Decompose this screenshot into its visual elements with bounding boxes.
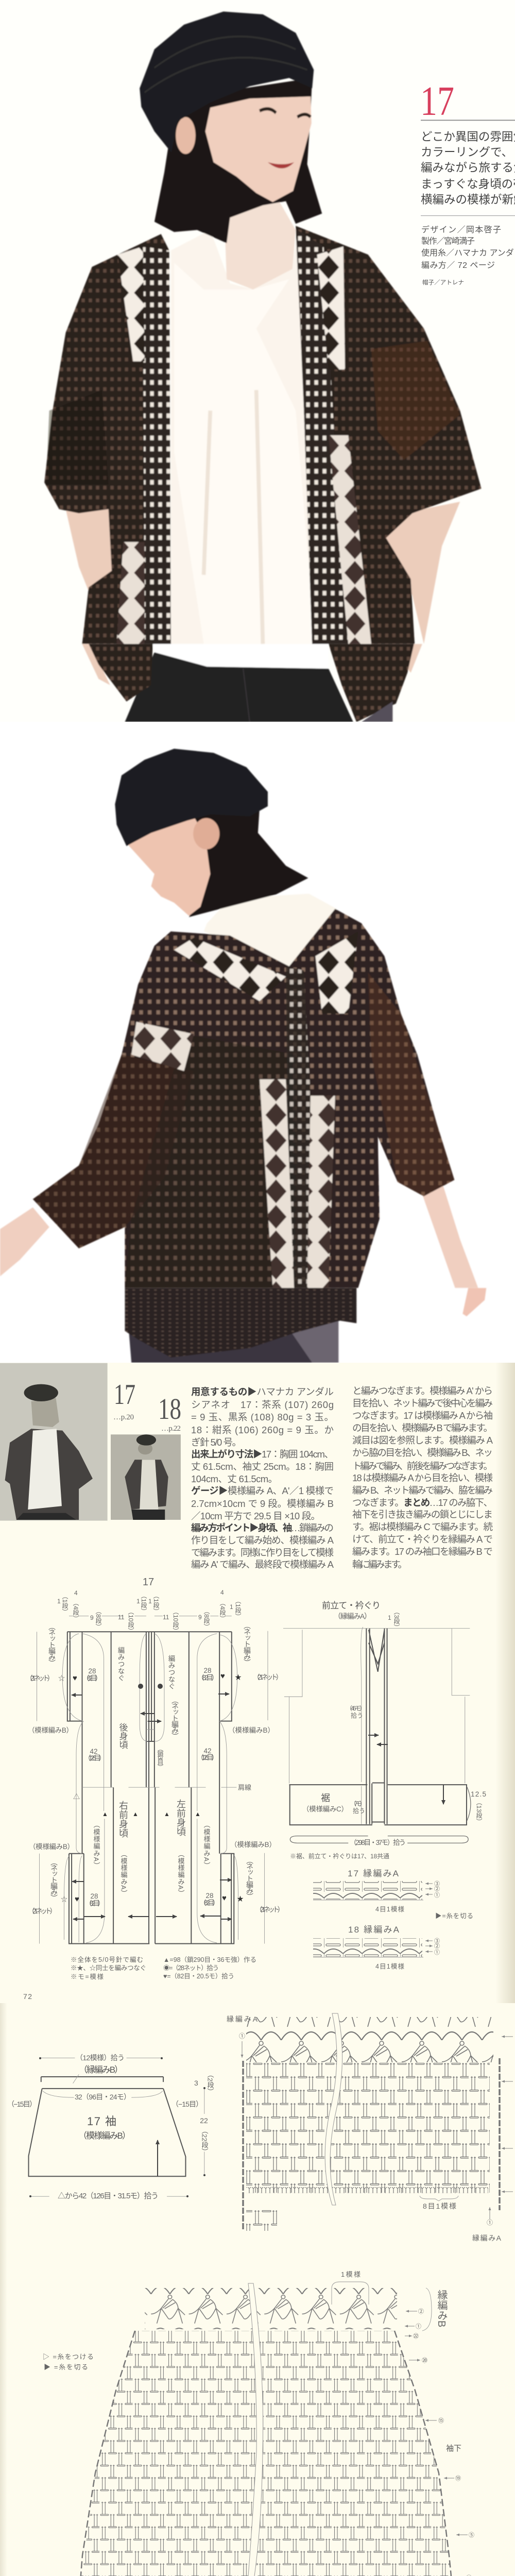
labels on schematic 17: （模様編みB） [230, 1841, 276, 1849]
text block: instructions right column: 編みます。17 のみ袖口を縁編み B で [352, 1546, 493, 1557]
labels on schematic 17: ▲ [132, 1810, 139, 1818]
labels on front band and hem diagram: 拾う [353, 1807, 365, 1815]
labels on schematic 17: 編みつなぐ [116, 1647, 125, 1682]
hair [154, 78, 322, 243]
edge chart: 17 edging A [313, 1869, 473, 1920]
chart: sleeve pattern B with edging B: ▷ =糸をつける [43, 2353, 94, 2361]
numbers and page refs [113, 1379, 181, 1433]
chart: sleeve pattern B with edging B: 1模様 [341, 2270, 360, 2278]
sleeve schematic 17: 22 [200, 2116, 208, 2125]
labels on schematic 17: 9 [198, 1614, 202, 1621]
labels on schematic 17: 肩線 [238, 1784, 251, 1791]
waist shirt hem [153, 644, 329, 669]
text block: materials and instructions left column: 丈 61.5cm、袖丈 25cm。18：胸囲 [191, 1461, 334, 1472]
neck [224, 193, 296, 290]
labels on schematic 17: 右前身頃 [118, 1801, 128, 1838]
notes for 17: ※全体を5/0号針で編む [71, 1956, 143, 1963]
edge chart: 17 edging A: ② [434, 1886, 440, 1892]
text block: instructions right column: 減目は図を参照します。模様編み A [352, 1435, 493, 1446]
photo: model wearing cardigan, front view [44, 11, 482, 722]
labels on schematic 17: （82目） [197, 1674, 218, 1682]
labels on schematic 17: 28 [205, 1892, 214, 1900]
labels on front band and hem diagram: 裾 [321, 1793, 330, 1803]
labels on schematic 17: 11 [163, 1614, 169, 1621]
text block: credits: 帽子／アトレナ [422, 279, 464, 286]
page background [0, 2003, 515, 2576]
beret [115, 749, 268, 846]
text block: credits: 編み方／ 72 ページ [421, 261, 495, 270]
labels on front band and hem diagram: （7モ） [350, 1800, 366, 1807]
labels on schematic 17 [26, 1577, 284, 1915]
notes for 17: ※モ=模様 [71, 1973, 104, 1980]
panel: back photo background [0, 722, 515, 1363]
labels on schematic 17: （126目） [197, 1754, 218, 1761]
labels on schematic 17: （21ネット） [253, 1673, 283, 1681]
eyes and lips [260, 109, 311, 117]
page number: 72 [23, 1992, 32, 2001]
cardigan hem left [89, 644, 153, 702]
sleeve schematic 17: （−15目） [171, 2100, 203, 2108]
labels on schematic 17: ▲ [195, 1810, 201, 1818]
beret [140, 11, 314, 152]
title: number 17: 17 [420, 79, 454, 124]
panel: page 72 [0, 1363, 515, 2003]
text block: instructions right column: つなぎます。まとめ…17 のみ脇下、 [352, 1497, 493, 1508]
chart: sleeve pattern B with edging B: ② [418, 2308, 424, 2315]
text block: instructions right column [352, 1385, 493, 1570]
text block: materials and instructions left column [191, 1386, 334, 1570]
text block: instructions right column: す。裾は模様編み C で編みます。続 [352, 1521, 493, 1532]
text block: materials and instructions left column: 用意するもの▶ハマナカ アンダル [191, 1386, 334, 1397]
labels on schematic 17: 編みつなぐ [167, 1655, 175, 1690]
labels on schematic 17: 28 [90, 1892, 98, 1900]
photo: grey thumbnail of 18 [111, 1434, 181, 1520]
page gutter [495, 1363, 515, 2003]
numbers and page refs: 18 [158, 1392, 181, 1426]
hands [82, 644, 110, 685]
cardigan hem [125, 1288, 356, 1358]
sleeve schematic 17: （模様編みB） [78, 2131, 131, 2141]
text block: credits [421, 225, 514, 286]
text block: instructions right column: から脇の目を拾い、模様編み B、ネッ [352, 1447, 493, 1458]
face [205, 96, 312, 202]
labels on schematic 17: （鎖3目） [157, 1745, 164, 1770]
labels on schematic 17: 17 [143, 1577, 154, 1588]
text block: credits: デザイン／岡本啓子 [421, 225, 501, 234]
labels on schematic 17: （模様編みB） [29, 1843, 74, 1851]
notes for 17: ▲=98（鎖290目・36モ強）作る [163, 1956, 256, 1963]
text block: materials and instructions left column: 編み A' で編み、最終段で模様編み A [191, 1559, 334, 1570]
chart: edging A and pattern B: ① [239, 2032, 245, 2040]
labels on schematic 17: 42 [203, 1747, 212, 1755]
labels on schematic 17: 左前身頃 [176, 1799, 186, 1836]
labels on schematic 17: （1段） [140, 1592, 147, 1615]
text block: materials and instructions left column: ／10cm 平方で 29.5 目 ×10 段。 [191, 1511, 320, 1521]
labels on schematic 17: ☆ [61, 1895, 67, 1903]
chart: sleeve pattern B with edging B: ㉒ [413, 2333, 419, 2340]
edge chart: 17 edging A: 17 縁編みA [348, 1869, 399, 1878]
centre back band [286, 967, 320, 1288]
trousers [129, 1319, 338, 1363]
labels on schematic 17: 9 [90, 1614, 94, 1621]
chart: sleeve pattern B with edging B: ▶ =糸を切る [44, 2363, 88, 2371]
jacket right panel [296, 226, 482, 644]
labels on schematic 17: 4 [74, 1589, 78, 1597]
labels on front band and hem diagram: 前立て・衿ぐり [322, 1601, 381, 1611]
labels on schematic 17: ★ [237, 1895, 244, 1903]
jacket body [33, 909, 454, 1288]
sleeve schematic 17: 32（96目・24モ） [75, 2093, 131, 2101]
labels on schematic 17: 1 [148, 1598, 152, 1605]
labels on front band and hem diagram: （縁編みA） [334, 1612, 371, 1620]
jacket left panel [44, 234, 171, 644]
edge chart: 17 edging A: 4目1模様 [375, 1905, 404, 1913]
page gutter [0, 2003, 7, 2576]
labels on schematic 17: （21ネット） [28, 1907, 57, 1915]
labels on schematic 17: （82目） [199, 1899, 219, 1907]
labels on schematic 17: （21ネット） [255, 1906, 284, 1913]
photo: grey thumbnail of 17 [0, 1363, 108, 1521]
text block: materials and instructions left column: 編み方ポイント▶身頃、袖…鎖編みの [191, 1522, 334, 1533]
face [127, 817, 210, 916]
labels on schematic 17: （10段） [127, 1608, 134, 1634]
labels on front band and hem diagram: 拾う [351, 1711, 363, 1719]
labels on schematic 17: （模様編みA） [203, 1821, 210, 1869]
text block: intro [421, 130, 515, 206]
labels on front band and hem diagram: 12.5 [471, 1790, 486, 1798]
labels on schematic 17: （1段） [61, 1593, 68, 1615]
text block: materials and instructions left column: 2.7cm×10cm で 9 段。模様編み B [191, 1498, 334, 1509]
skirt shade [362, 702, 392, 722]
labels on front band and hem diagram [290, 1601, 486, 1860]
edge chart: 18 edging A: 4目1模様 [375, 1962, 404, 1970]
chart: sleeve pattern B with edging B: ⑲ [455, 2475, 461, 2482]
labels on schematic 17: ▲ [102, 1810, 108, 1818]
front bands [143, 246, 171, 644]
labels on schematic 17: 28 [88, 1667, 96, 1675]
labels on front band and hem diagram: （模様編みC） [302, 1805, 348, 1813]
labels on schematic 17: （模様編みB） [28, 1726, 73, 1734]
text block: materials and instructions left column: 104cm、丈 61.5cm。 [191, 1473, 278, 1484]
labels on schematic 17: 28 [203, 1667, 212, 1674]
text block: materials and instructions left column: ゲージ▶模様編み A、A'／1 模様で [191, 1485, 334, 1496]
numbers and page refs: 17 [114, 1379, 135, 1411]
divider rule [421, 120, 515, 121]
labels on front band and hem diagram: 1 [388, 1614, 391, 1621]
labels on schematic 17: （模様編みA） [119, 1851, 128, 1896]
text block: credits: 使用糸／ハマナカ アンダ [421, 248, 514, 258]
labels on schematic 17: ★ [235, 1673, 242, 1681]
text block: instructions right column: けて、前立て・衿ぐりを縁編み A で [352, 1534, 493, 1545]
panel: front photo background [0, 0, 515, 722]
chart: sleeve pattern B with edging B [43, 2270, 494, 2576]
labels on schematic 17: ♥ [220, 1672, 225, 1681]
labels on schematic 17: ♥ [222, 1894, 227, 1903]
sleeve schematic 17: 17 袖 [87, 2115, 116, 2128]
chart: sleeve pattern B with edging B: 袖下 [446, 2444, 461, 2453]
labels on schematic 17: ▲ [164, 1810, 170, 1818]
labels on schematic 17: ♥ [75, 1895, 79, 1904]
chart: sleeve pattern B with edging B: ⑳ [422, 2357, 427, 2364]
labels on schematic 17: （21ネット） [26, 1674, 54, 1682]
chart: sleeve pattern B with edging B: ① [416, 2323, 421, 2330]
labels on schematic 17: （126目） [84, 1754, 106, 1762]
cardigan hem right [329, 644, 414, 722]
right arm [384, 502, 460, 644]
labels on schematic 17: ☆ [58, 1674, 65, 1682]
numbers and page refs: …p.20 [113, 1413, 134, 1421]
text block: instructions right column: ト編みで編み、前後を編みつなぎます。 [352, 1461, 493, 1471]
labels on front band and hem diagram: （46モ） [346, 1705, 366, 1712]
sleeve schematic 17: （22段） [201, 2127, 208, 2155]
edge chart: 18 edging A: 18 縁編みA [348, 1925, 400, 1935]
sleeve schematic 17 [7, 2054, 214, 2200]
notes for 17: ♥=（82目・20.5モ）拾う [163, 1972, 234, 1980]
chart: edging A and pattern B [227, 2013, 513, 2242]
text block: instructions right column: 目を拾い、ネット編みで後中心を編み [352, 1398, 493, 1409]
labels on front band and hem diagram: （13段） [475, 1799, 483, 1824]
text block: instructions right column: 袖下を引き抜き編みの鎖とじにしま [352, 1509, 493, 1520]
ear [193, 818, 219, 849]
labels on schematic 17: （8段） [203, 1608, 210, 1630]
text block: materials and instructions left column: シアネオ 17：茶系 (107) 260g [191, 1399, 334, 1410]
sleeve schematic 17: 3 [194, 2079, 198, 2087]
text block: instructions right column: 輪に編みます。 [352, 1559, 407, 1570]
text block: instructions right column: 編み B、ネット編みで編み、脇を編み [352, 1485, 493, 1496]
diamond strips [117, 246, 145, 361]
diamond strips [174, 938, 286, 1001]
edge chart: 17 edging A: ▶=糸を切る [435, 1912, 473, 1920]
shirt collar [204, 894, 337, 969]
arms [0, 1207, 49, 1276]
trousers [125, 652, 353, 722]
chart: edging A and pattern B: ① [487, 2219, 493, 2226]
labels on schematic 17: （8段） [95, 1608, 102, 1630]
sleeve schematic 17: △から42（126目・31.5モ）拾う [58, 2192, 159, 2200]
hair [184, 808, 308, 917]
labels on schematic 17: （ネット編み） [243, 1622, 251, 1666]
labels on schematic 17: （82目） [82, 1674, 102, 1682]
labels on schematic 17: （1段） [152, 1592, 160, 1615]
labels on schematic 17: 42 [90, 1748, 98, 1755]
text block: materials and instructions left column: = 9 玉、黒系 (108) 80g = 3 玉。 [191, 1412, 334, 1422]
labels on schematic 17: （模様編みA） [177, 1851, 184, 1896]
labels on schematic 17: 1 [57, 1598, 61, 1605]
edge chart: 18 edging A: ① [434, 1949, 440, 1956]
labels on schematic 17: △ [73, 1793, 80, 1801]
labels on schematic 17: 4 [220, 1589, 224, 1596]
labels on schematic 17: （1段） [234, 1598, 242, 1620]
labels on schematic 17: 11 [118, 1614, 125, 1621]
labels on schematic 17: 1 [136, 1598, 140, 1605]
text block: instructions right column: 18 は模様編み A から目を拾い、模様 [352, 1472, 493, 1483]
text block: materials and instructions left column: ぎ針 5/0 号。 [191, 1437, 242, 1448]
labels on schematic 17: ♥ [73, 1674, 77, 1683]
labels on schematic 17: （4段） [72, 1600, 79, 1622]
labels on schematic 17: （模様編みA） [93, 1821, 100, 1869]
panel: sleeve page [0, 2003, 515, 2576]
text block: instructions right column: と編みつなぎます。模様編み A' から [352, 1385, 493, 1396]
brown yarn tone on sleeves [371, 341, 460, 460]
labels on schematic 17: 後身頃 [117, 1723, 128, 1749]
divider rule lower [421, 215, 515, 216]
labels on schematic 17: （ネット編み） [48, 1623, 56, 1667]
sleeve schematic 17: （−15目） [7, 2100, 37, 2108]
chart: edging A and pattern B: 縁編みA [227, 2015, 258, 2023]
labels on schematic 17: 1 [230, 1603, 233, 1611]
labels on schematic 17: （ネット編み） [171, 1697, 179, 1740]
text block: materials and instructions left column: で編みます。同様に作り目をして模様 [191, 1547, 334, 1558]
notes for 17: ◉=（28ネット）拾う [163, 1964, 219, 1972]
sleeve schematic 17: （縁編みB） [79, 2065, 123, 2075]
arrows on schematic 17 [72, 1694, 443, 1919]
labels on schematic 17: （82目） [85, 1900, 105, 1907]
scarf tie [174, 263, 315, 644]
text block: instructions right column: つなぎます。17 は模様編み A から袖 [352, 1410, 493, 1421]
chart: sleeve pattern B with edging B: 縁編みB [436, 2290, 448, 2327]
sleeve and body tone [368, 973, 454, 1196]
text block: materials and instructions left column: 出来上がり寸法▶17：胸囲 104cm、 [191, 1449, 334, 1460]
sleeve schematic 17: （12模様）拾う [76, 2054, 125, 2062]
edge chart: 18 edging A: ③ [434, 1938, 440, 1944]
chart: edging A and pattern B: 縁編みA [472, 2234, 502, 2242]
labels on front band and hem diagram: （3段） [393, 1608, 400, 1631]
sleeve schematic 17: （2段） [206, 2071, 214, 2095]
ear [176, 117, 196, 154]
edge chart: 17 edging A: ③ [434, 1880, 440, 1887]
labels on schematic 17: （ネット編み） [50, 1858, 58, 1902]
edge chart: 18 edging A: ② [434, 1943, 440, 1950]
notes for 17: ※★、☆同士を編みつなぐ [71, 1964, 146, 1972]
labels on front band and hem diagram: （298目・37モ）拾う [350, 1839, 406, 1846]
chart: edging A and pattern B: 8目1模様 [423, 2202, 456, 2210]
edge chart: 18 edging A [313, 1925, 440, 1970]
left arm [66, 507, 113, 591]
notes for 17 [71, 1956, 256, 1980]
hand [462, 1288, 486, 1316]
text block: intro: カラーリングで、 [421, 146, 513, 159]
labels on schematic 17: （模様編みB） [228, 1726, 274, 1734]
chart: sleeve pattern B with edging B: ⑮ [438, 2417, 444, 2424]
photo: model wearing cardigan, back view [0, 749, 486, 1363]
labels on schematic 17: （4段） [219, 1600, 226, 1622]
text block: materials and instructions left column: 作り目をして編み始め、模様編み A [191, 1535, 334, 1546]
schematic: 17 body lines [37, 1616, 471, 1944]
labels on schematic 17: （ネット編み） [246, 1857, 254, 1900]
text block: materials and instructions left column: 18：紺系 (106) 260g = 9 玉。か [191, 1425, 334, 1435]
text block: credits: 製作／宮崎満子 [421, 236, 475, 246]
shirt [171, 230, 312, 644]
labels on front band and hem diagram: ※裾、前立て・衿ぐりは17、18共通 [290, 1852, 389, 1860]
chart: sleeve pattern B with edging B: ⑤ [469, 2532, 474, 2538]
text block: instructions right column: の目を拾い、模様編み B で編みます。 [352, 1422, 493, 1433]
page background [0, 1363, 515, 2003]
edge chart: 17 edging A: ① [434, 1892, 440, 1899]
labels on schematic 17: （10段） [172, 1608, 179, 1634]
numbers and page refs: …p.22 [161, 1425, 181, 1433]
